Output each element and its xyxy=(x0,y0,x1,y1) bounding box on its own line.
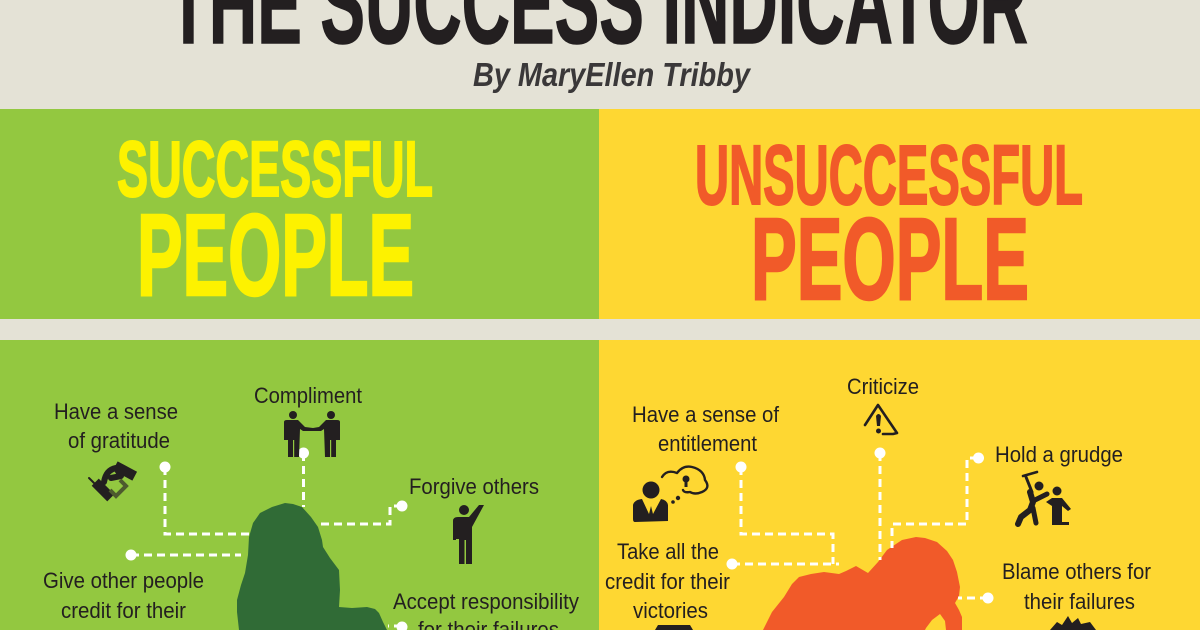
text: blame others: their failures xyxy=(1024,589,1135,614)
connector lines: successful xyxy=(126,448,408,630)
text: have a sense of entitlement: entitlement xyxy=(658,431,757,456)
text: take all the credit xyxy=(605,539,730,623)
icon: warning triangle xyxy=(865,405,897,434)
figure: successful person silhouette xyxy=(237,503,387,630)
text: give other people credit: credit for their xyxy=(61,598,186,623)
text: have a sense of gratitude: Have a sense xyxy=(54,399,178,424)
text: accept responsibility: Accept responsibility xyxy=(393,589,579,614)
panel: successful people header xyxy=(0,109,599,320)
text: forgive others: Forgive others xyxy=(409,474,539,499)
icon: handshake xyxy=(89,461,137,501)
text: give other people credit xyxy=(43,568,204,623)
text: have a sense of entitlement: Have a sense of xyxy=(632,402,780,427)
text: give other people credit: Give other people xyxy=(43,568,204,593)
icon: burst xyxy=(1050,616,1096,630)
text: take all the credit: victories xyxy=(633,598,708,623)
text: take all the credit: credit for their xyxy=(605,569,730,594)
text: hold a grudge: Hold a grudge xyxy=(995,442,1123,467)
figure: unsuccessful person silhouette xyxy=(763,537,962,630)
panel: unsuccessful people traits xyxy=(599,340,1200,630)
panel: unsuccessful people header xyxy=(599,109,1200,324)
text: compliment: Compliment xyxy=(254,383,362,408)
panel: successful people header: PEOPLE xyxy=(137,190,414,320)
text: take all the credit: Take all the xyxy=(617,539,719,564)
text: criticize: Criticize xyxy=(847,374,919,399)
text: have a sense of gratitude: of gratitude xyxy=(68,428,170,453)
text: have a sense of entitlement xyxy=(632,402,780,456)
icon: trophy top xyxy=(655,625,693,630)
text: accept responsibility xyxy=(393,589,579,630)
icon: man thinking of himself xyxy=(633,467,707,522)
text: blame others xyxy=(1002,559,1151,614)
panel: successful people traits xyxy=(0,340,599,630)
text: have a sense of gratitude xyxy=(54,399,178,453)
icon: person raising hand xyxy=(453,505,484,564)
byline: By MaryEllen Tribby xyxy=(473,56,751,93)
panel: successful people header: SUCCESSFUL xyxy=(117,124,433,213)
icon: two people fighting xyxy=(1018,472,1071,525)
text: blame others: Blame others for xyxy=(1002,559,1151,584)
icon: two people shaking hands xyxy=(284,411,340,457)
connector lines: unsuccessful xyxy=(726,448,994,604)
